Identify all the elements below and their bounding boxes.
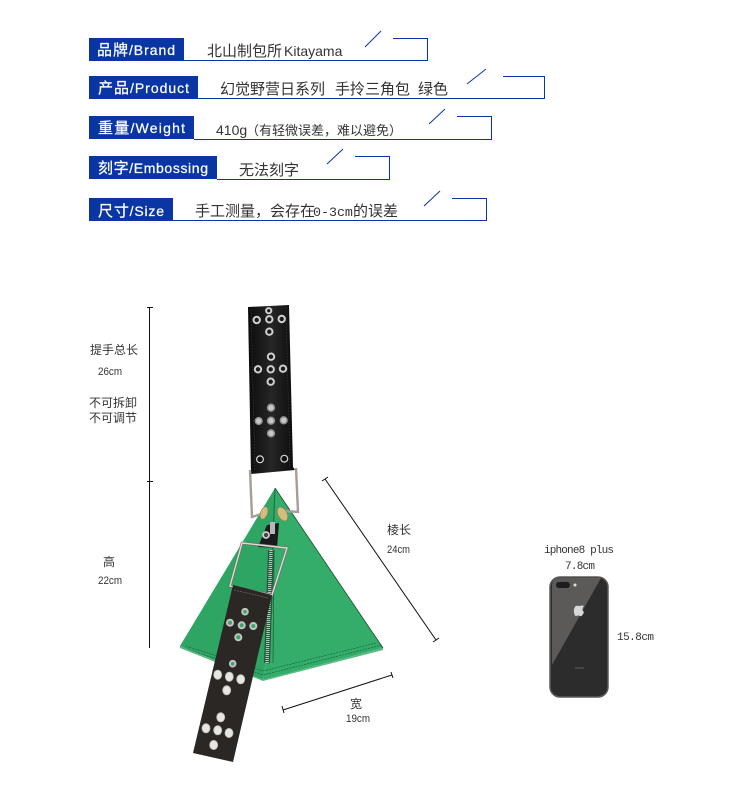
dimension: width [282, 672, 393, 725]
dimension: handle and height vertical line [147, 307, 153, 648]
height label [98, 554, 122, 587]
spec row: size: 的误差 [353, 203, 398, 220]
zipper [267, 550, 274, 663]
height label: 高 [103, 554, 115, 569]
phone labels: iphone8 plus [544, 545, 614, 557]
phone labels: 15.8cm [617, 632, 654, 644]
spec row: weight: 410g [216, 122, 247, 138]
spec row: size [89, 191, 486, 221]
spec row: brand [89, 31, 428, 61]
dimension: edge length: 棱长 [387, 522, 411, 537]
spec row: product: 幻觉野营日系列 [220, 81, 325, 98]
handle length label: 不可调节 [89, 411, 137, 425]
spec row: brand: 品牌/Brand [97, 42, 175, 59]
spec row: brand: 北山制包所 [207, 43, 282, 60]
spec row: weight [89, 109, 492, 140]
top handle strap [248, 305, 295, 474]
spec row: embossing: 无法刻字 [239, 162, 299, 179]
spec row: brand: Kitayama [284, 43, 343, 59]
spec row: size: 0-3cm [313, 205, 353, 220]
phone labels: 7.8cm [565, 561, 595, 573]
handle length label: 提手总长 [90, 342, 138, 357]
spec row: embossing: 刻字/Embossing [98, 160, 208, 177]
product: triangular bag with strap [180, 305, 383, 762]
handle length label: 不可拆卸 [89, 395, 137, 410]
front buckle [230, 543, 287, 595]
dimension: edge length [322, 477, 439, 642]
spec row: product: 手拎三角包 [335, 81, 410, 98]
dimension: width: 19cm [346, 713, 370, 725]
spec row: size: 尺寸/Size [98, 203, 164, 220]
spec row: product: 产品/Product [98, 80, 189, 97]
pyramid body [180, 488, 383, 681]
handle length label: 26cm [98, 366, 122, 378]
lower strap [193, 585, 272, 762]
metal handle ring [250, 468, 298, 517]
zipper pull tab [258, 522, 279, 548]
dimension: edge length: 24cm [387, 544, 410, 556]
gold eyelets [258, 505, 290, 523]
spec row: product: 绿色 [418, 81, 448, 98]
spec row: weight: （有轻微误差，难以避免） [246, 123, 402, 138]
spec row: size: 手工测量，会存在 [195, 203, 315, 220]
spec row: weight: 重量/Weight [98, 120, 185, 137]
spec row: product [89, 69, 544, 99]
phone labels [544, 545, 654, 644]
phone body [550, 577, 608, 697]
height label: 22cm [98, 575, 122, 587]
phone size reference: iPhone 8 Plus [544, 545, 654, 697]
handle length label [89, 342, 138, 425]
spec row: embossing [89, 149, 390, 180]
dimension: width: 宽 [350, 696, 362, 711]
